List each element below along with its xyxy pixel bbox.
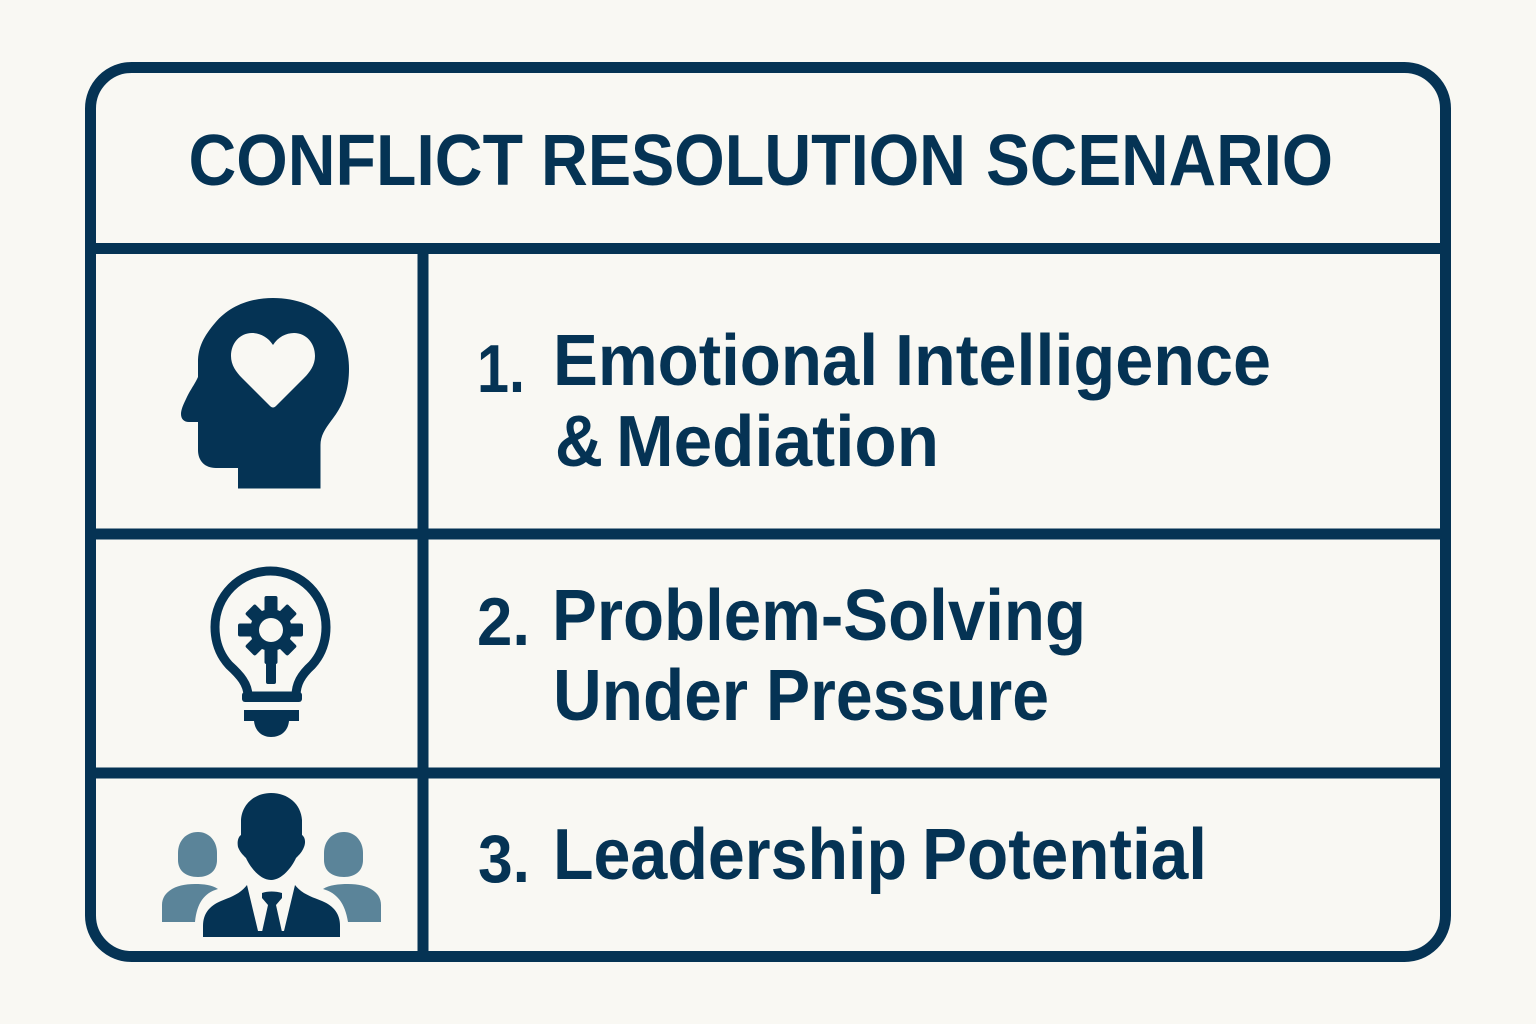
number 1: 1. [477,331,525,407]
label: Emotional Intelligence & Mediation [553,321,1271,482]
label: Problem-Solving Under Pressure: Under [553,656,748,736]
panel: row 3 leadership [162,793,1207,937]
title [188,121,1333,201]
icon: light bulb with gear [215,571,326,737]
label: Emotional Intelligence & Mediation: Intelligence [895,321,1271,401]
label: Emotional Intelligence & Mediation: Mediation [616,402,939,482]
panel: row 2 problem solving [215,571,1086,737]
label: Emotional Intelligence & Mediation: & [555,402,603,482]
title: SCENARIO [986,121,1333,201]
label: Problem-Solving Under Pressure [552,576,1086,736]
label: Problem-Solving Under Pressure: Problem-Solving [552,576,1086,656]
label: Leadership Potential [553,815,1207,895]
label: Problem-Solving Under Pressure: Pressure [766,656,1049,736]
icon: leader with team [162,793,381,937]
label: Leadership Potential: Potential [922,815,1207,895]
number 3: 3. [478,821,530,897]
title: CONFLICT [188,121,523,201]
label: Leadership Potential: Leadership [553,815,907,895]
title: RESOLUTION [541,121,966,201]
label: Emotional Intelligence & Mediation: Emotional [553,321,878,401]
panel: row 1 emotional intelligence [181,298,1271,488]
icon: head with heart [181,298,349,488]
panel: outer table frame [90,68,1446,956]
number 2: 2. [477,584,530,660]
